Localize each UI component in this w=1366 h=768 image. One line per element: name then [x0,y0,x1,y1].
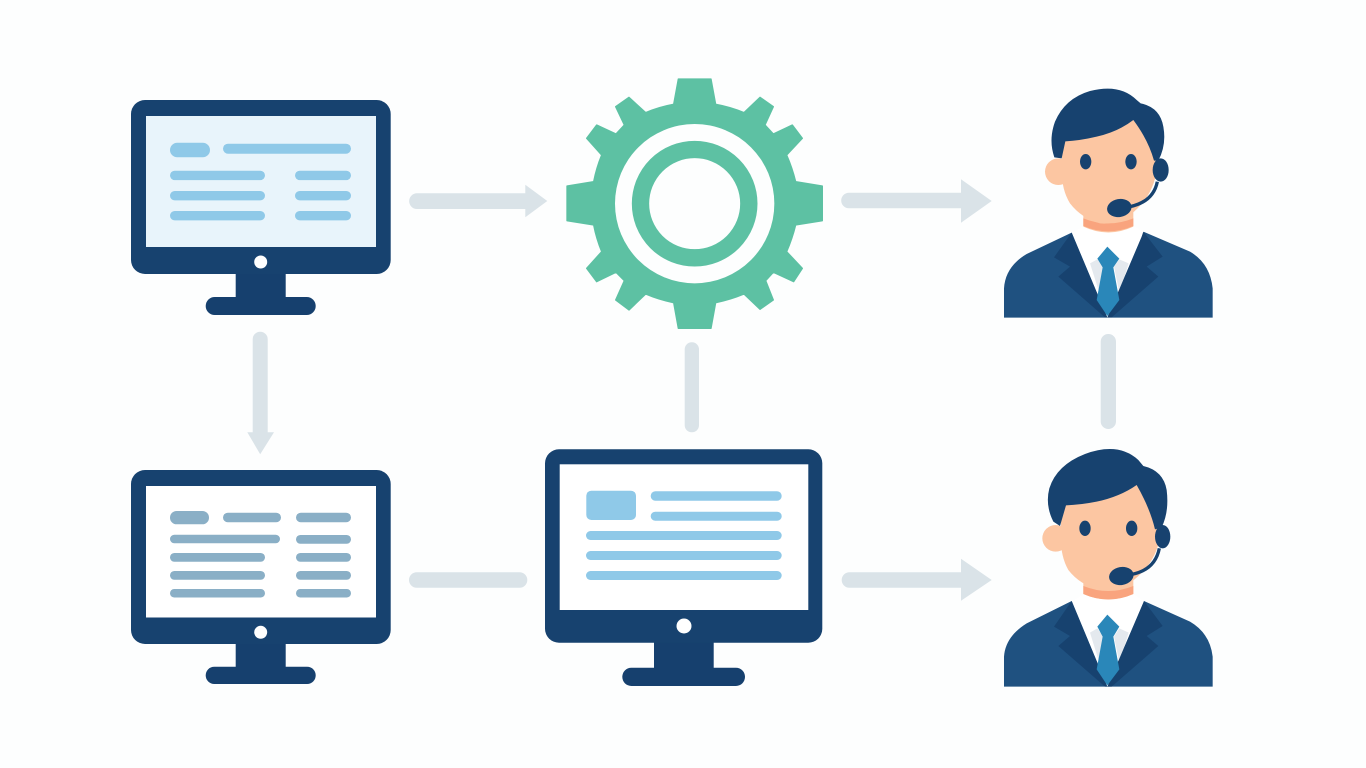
icon: agent top [1004,89,1213,318]
connector: right vertical [1101,334,1116,429]
icon: gear [567,79,822,328]
arrow: gear to agent [841,179,992,223]
arrow: monitor down [247,332,274,454]
arrow: monitor to agent [842,559,992,601]
icon: agent bottom [1004,449,1213,687]
connector: gear to monitor [685,342,699,432]
icon: monitor bottom centre [545,449,822,686]
icon: monitor bottom left [131,470,391,684]
icon: monitor top left [131,100,391,315]
connector: monitor to monitor [409,572,527,588]
arrow: monitor to gear [409,185,547,217]
